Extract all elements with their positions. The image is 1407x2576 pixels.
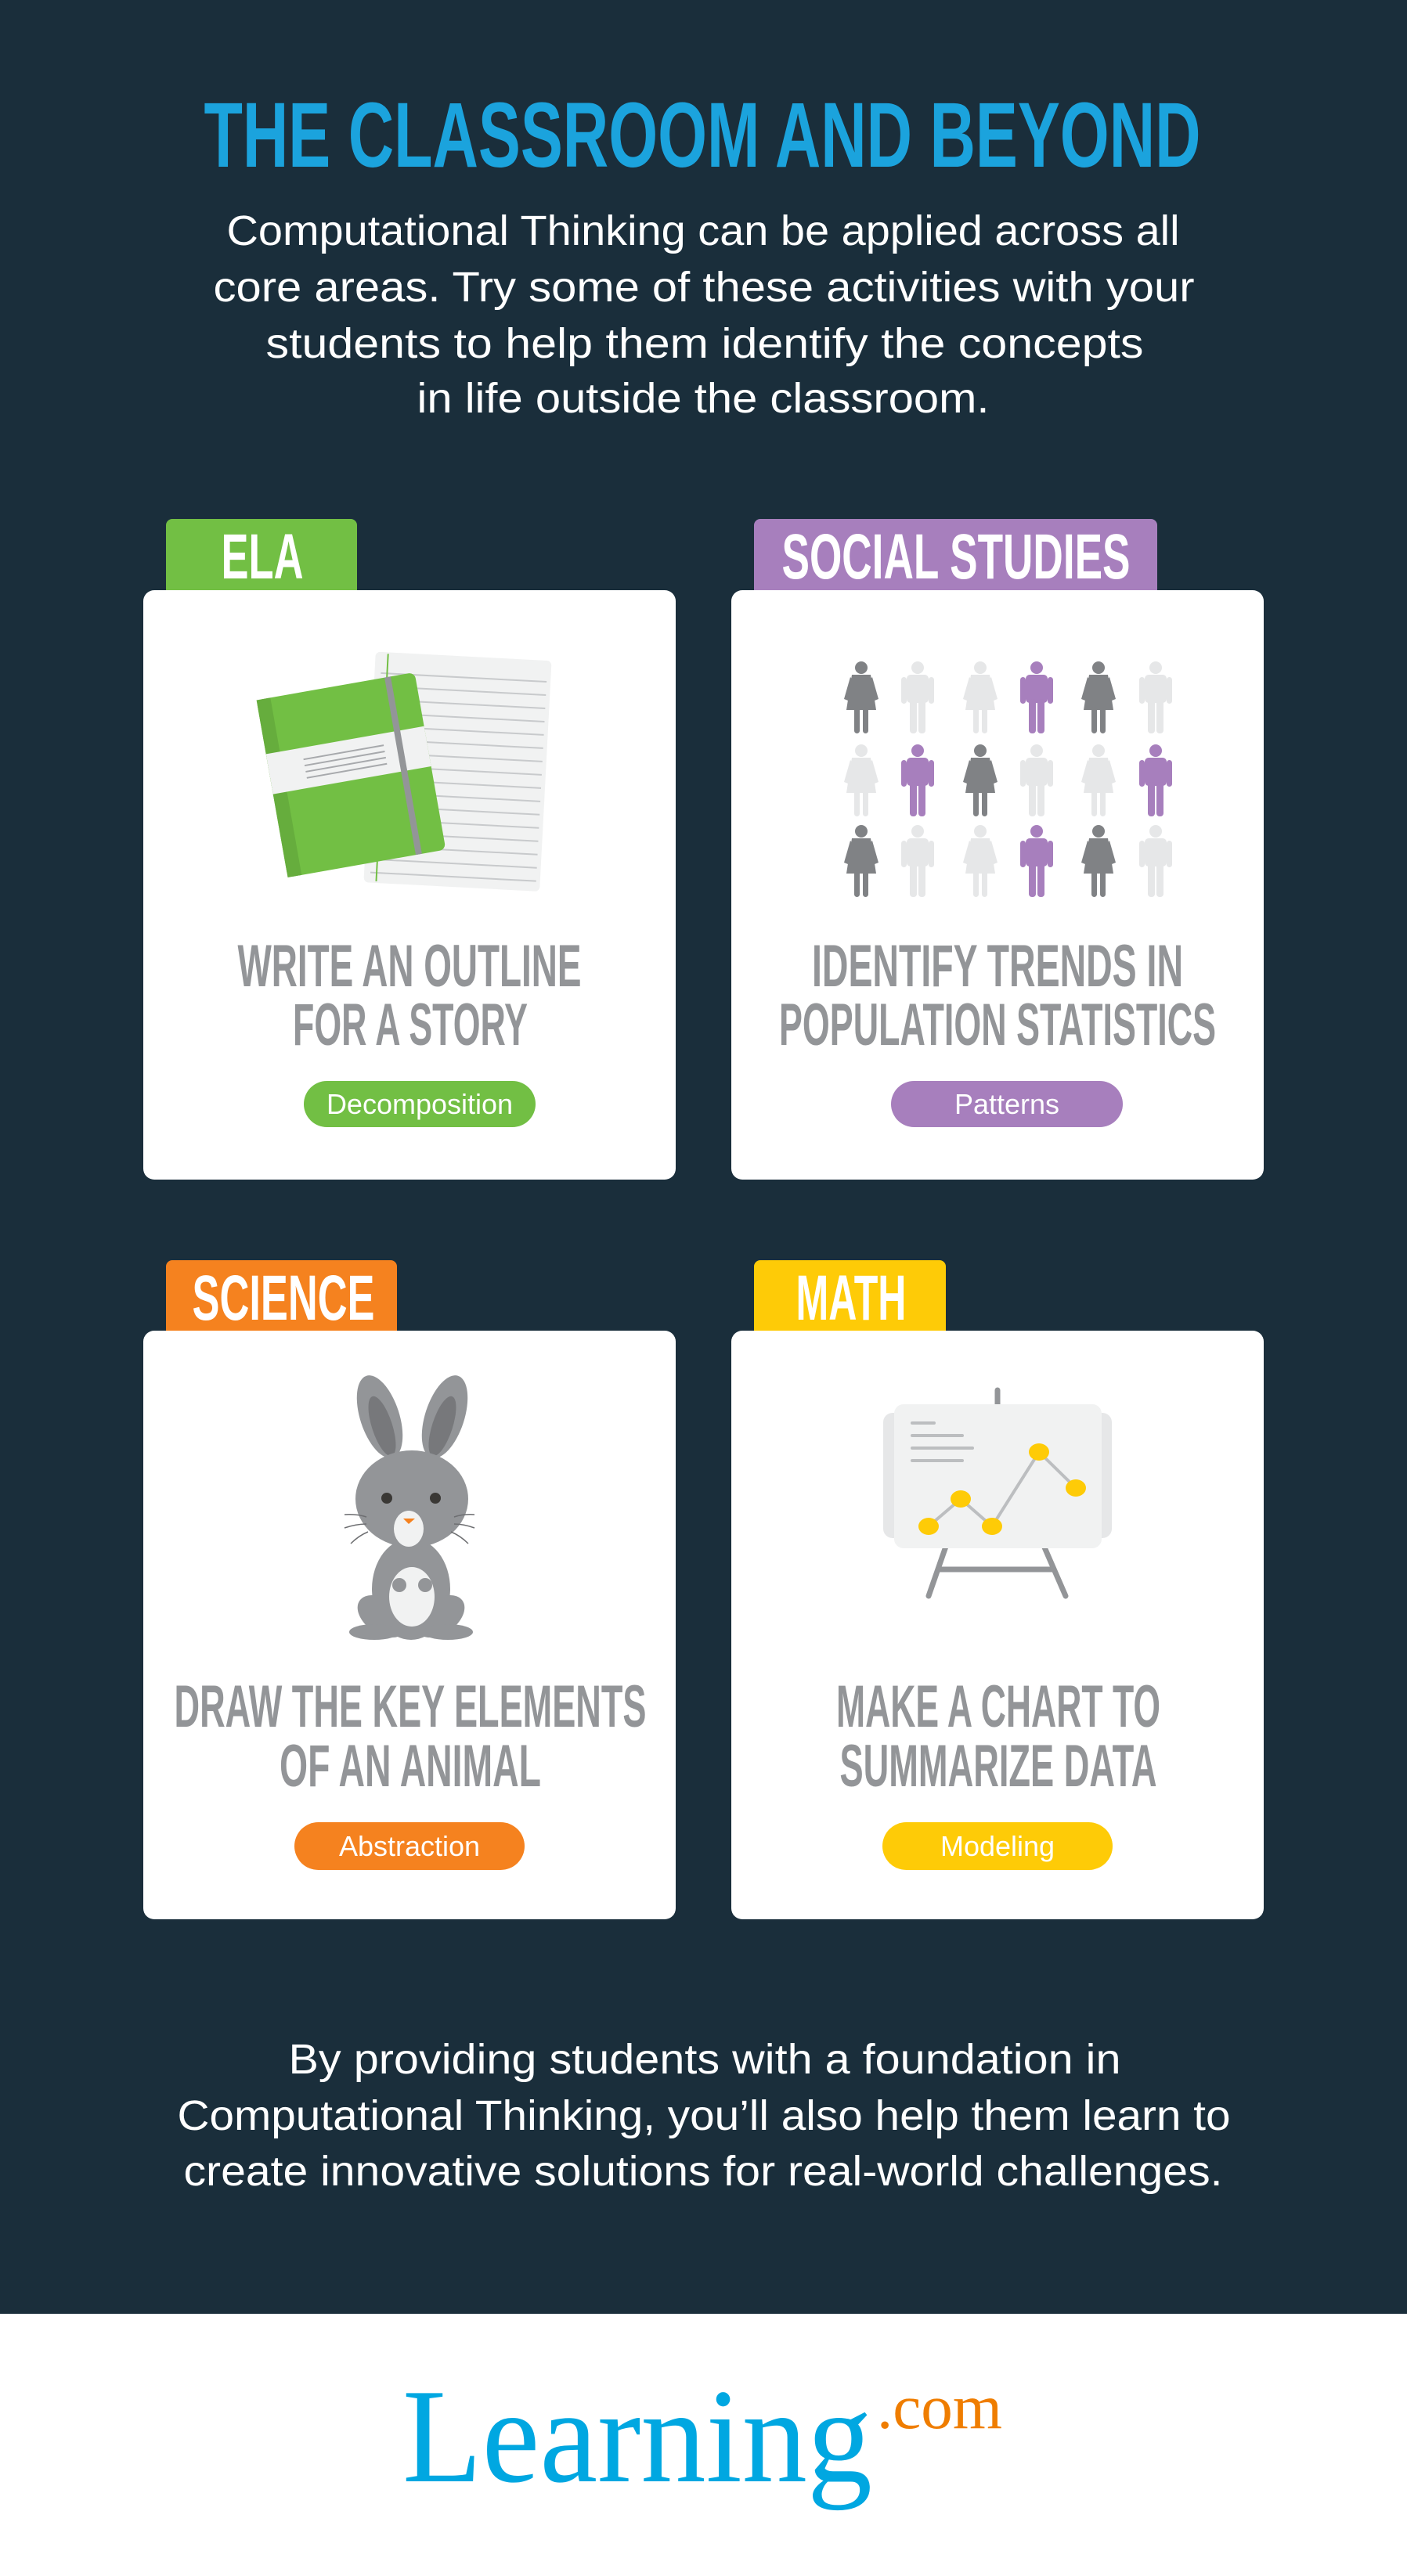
heading: draw the key elements: OF AN ANIMAL	[280, 1733, 541, 1800]
logo: .com	[877, 2373, 1002, 2442]
closing text: create innovative solutions for real-world challenges.	[183, 2148, 1223, 2195]
heading: identify trends: IDENTIFY TRENDS IN	[812, 933, 1183, 1000]
heading: write an outline: FOR A STORY	[293, 992, 528, 1058]
closing text: Computational Thinking, you’ll also help them learn to	[177, 2092, 1231, 2139]
heading: make a chart: SUMMARIZE DATA	[839, 1733, 1157, 1800]
pill: Decomposition	[304, 1081, 536, 1127]
tab: science: SCIENCE	[193, 1263, 374, 1334]
intro text: core areas. Try some of these activities with your	[213, 264, 1195, 311]
heading: draw the key elements	[174, 1673, 647, 1800]
heading: write an outline	[238, 933, 581, 1058]
icon: population grid	[844, 661, 1172, 897]
panel: math	[731, 1260, 1264, 1919]
closing text	[177, 2036, 1231, 2195]
pill: Abstraction: Abstraction	[339, 1830, 480, 1862]
tab: ELA: ELA	[221, 521, 304, 593]
tab: science	[166, 1260, 397, 1338]
logo: Learning	[402, 2362, 872, 2511]
intro text: in life outside the classroom.	[417, 375, 990, 422]
icon: rabbit	[345, 1370, 477, 1646]
tab: math	[754, 1260, 946, 1338]
heading: draw the key elements: DRAW THE KEY ELEMENTS	[174, 1673, 647, 1740]
panel: science	[143, 1260, 676, 1919]
pill: Patterns: Patterns	[954, 1088, 1059, 1120]
icon: easel chart	[883, 1390, 1112, 1596]
pill: Modeling: Modeling	[940, 1830, 1055, 1862]
tab: social studies: SOCIAL STUDIES	[781, 521, 1131, 593]
pill: Abstraction	[294, 1822, 525, 1870]
tab: ELA	[166, 519, 357, 597]
panel: ELA	[143, 519, 676, 1180]
tab: math: MATH	[795, 1263, 907, 1334]
panel: social studies	[731, 519, 1264, 1180]
heading: write an outline: WRITE AN OUTLINE	[238, 933, 581, 1000]
intro text	[213, 207, 1195, 422]
closing text: By providing students with a foundation in	[288, 2036, 1121, 2083]
heading: make a chart	[836, 1673, 1160, 1800]
heading: make a chart: MAKE A CHART TO	[836, 1673, 1160, 1740]
intro text: students to help them identify the concepts	[266, 320, 1143, 367]
intro text: Computational Thinking can be applied across all	[227, 207, 1179, 254]
pill: Decomposition: Decomposition	[326, 1088, 513, 1120]
pill: Patterns	[891, 1081, 1123, 1127]
pill: Modeling	[882, 1822, 1113, 1870]
footer	[0, 2314, 1407, 2576]
tab: social studies	[754, 519, 1157, 597]
icon: notebook and paper	[257, 652, 552, 892]
heading: identify trends	[779, 933, 1216, 1058]
